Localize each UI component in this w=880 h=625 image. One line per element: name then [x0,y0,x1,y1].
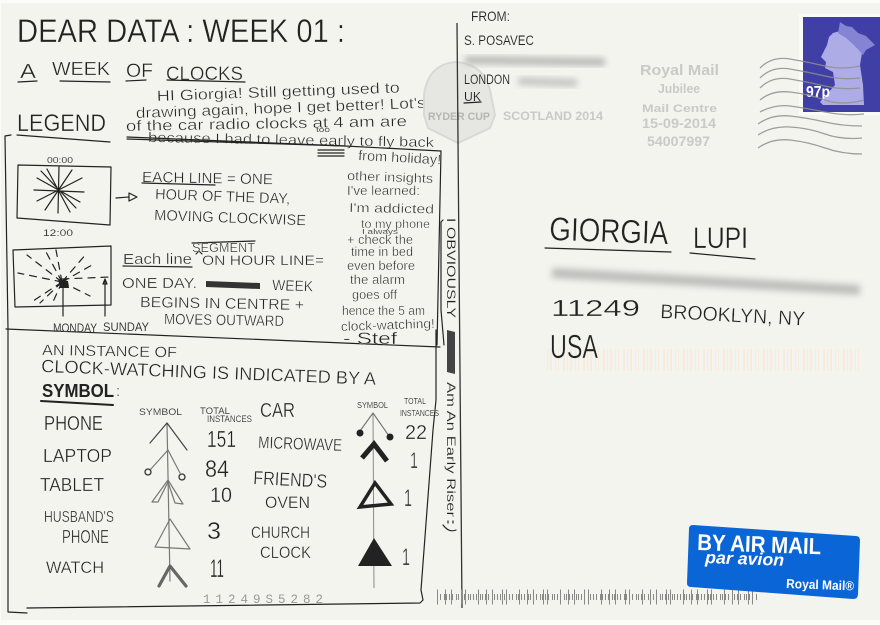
text block: greeting note [126,80,442,167]
stamp [799,14,880,115]
postmark: royal mail jubilee: 54007997 [647,133,710,149]
recipient city: USA [550,328,598,365]
panel frame: legend and symbols box [5,135,441,613]
text block: greeting note: HI Giorgia! Still getting used to [157,80,400,105]
heading: legend: LEGEND [17,110,106,137]
instance counts: left: 84 [205,456,229,483]
text block: instance of clock-watching: CLOCK-WATCHING IS INDICATED BY A [41,356,376,389]
vertical note: I obviously am an early riser: Am An Early Riser [444,382,458,517]
text block: other insights: time in bed [351,244,413,259]
return address: UK [464,89,481,104]
text block: instance of clock-watching [41,342,376,389]
text block: other insights: even before [347,258,415,273]
text block: greeting note: from holiday! [358,147,442,167]
instance counts: left [205,426,236,583]
column headers: right: TOTAL [404,397,426,406]
recipient city [550,295,806,365]
text block: other insights: I always [362,227,398,236]
clock diagram: each line is one hour [17,155,111,239]
recipient city: 11249 [551,295,640,321]
clock diagram: dashed week of segments [13,246,111,316]
device labels: right column: MICROWAVE [258,433,342,455]
air mail label [687,525,860,599]
column headers: left: INSTANCES [207,414,252,424]
instance counts: left: 10 [210,484,232,507]
return address [464,8,605,104]
recipient name: LUPI [693,222,748,255]
title: DEAR DATA : WEEK 01 : [17,13,345,49]
instance counts: right: 1 [410,448,418,473]
recipient city: BROOKLYN, NY [660,301,806,331]
phosphor barcode: orange tint [547,349,862,371]
text block: line segment explanation: ON HOUR LINE= [202,252,324,268]
text block: greeting note: of the car radio clocks at 4 am are [126,113,407,135]
subtitle: a week of clocks: CLOCKS [166,64,243,85]
stamp value: 97p [806,84,830,101]
device labels: right column [251,400,342,562]
postmark: royal mail jubilee [640,62,719,149]
text block: other insights: other insights [347,168,434,186]
text block: other insights: - Stef [343,329,397,348]
subtitle: a week of clocks: OF [126,61,153,82]
device labels: left column: LAPTOP [43,446,112,466]
device labels: right column: OVEN [265,493,310,512]
symbols: phone, laptop, tablet, husband's phone, watch [145,423,190,586]
labels: monday and sunday: SUNDAY [103,320,149,334]
postmark: wavy cancellation lines [758,58,864,154]
heading: symbol: SYMBOL [42,381,114,401]
column headers: right: SYMBOL [357,401,389,410]
divider: postcard centre line [457,23,462,608]
postmark: ryder cup [424,62,495,143]
recipient name: GIORGIA [549,210,669,251]
subtitle: a week of clocks: WEEK [52,59,110,79]
text block: other insights: to my phone [361,217,430,231]
column headers: right [357,397,439,418]
text block: line segment explanation [122,240,324,330]
column headers: left: TOTAL [200,406,230,416]
icon: queen's head [820,31,864,105]
text block: line segment explanation: Each line [123,251,192,268]
text block: each line explanation: EACH LINE = ONE [142,169,273,188]
text block: each line explanation: HOUR OF THE DAY, [155,186,290,208]
column headers: right: INSTANCES [400,409,439,418]
text block: line segment explanation: BEGINS IN CENTRE + [140,294,304,314]
postmark: royal mail jubilee: Royal Mail [640,62,719,79]
return address: FROM: [471,8,510,24]
column headers: left: SYMBOL [139,407,182,417]
device labels: left column: HUSBAND'S [44,509,114,526]
device labels: left column [40,413,114,577]
subtitle: a week of clocks [18,59,245,85]
text block: other insights: clock-watching! [341,316,435,334]
clock diagram: each line is one hour: 12:00 [43,228,73,239]
clock diagram: each line is one hour: 00:00 [47,155,73,165]
labels: monday and sunday [53,320,149,335]
text block: each line explanation: MOVING CLOCKWISE [154,207,306,229]
instance counts: right: 1 [404,485,412,512]
column headers: left [139,406,252,424]
device labels: right column: CAR [260,400,295,422]
instance counts: right: 22 [405,422,427,444]
text block: other insights: the alarm [350,272,405,287]
vertical note: I obviously am an early riser [441,218,458,531]
icon: crown [838,22,875,55]
labels: monday and sunday: MONDAY [53,321,97,335]
subtitle: a week of clocks: A [20,61,37,83]
air mail label: Royal Mail® [786,576,855,593]
device labels: right column: CLOCK [260,543,312,562]
text block: line segment explanation: SEGMENT [192,240,255,255]
postmark: royal mail jubilee: Mail Centre [642,103,717,115]
text block: line segment explanation: ONE DAY. [122,275,197,292]
device labels: left column: PHONE [44,413,103,435]
text block: instance of clock-watching: AN INSTANCE OF [42,342,177,361]
text block: greeting note: because I had to leave early to fly back [148,129,435,150]
postmark: ryder cup: RYDER CUP [428,111,490,123]
device labels: left column: TABLET [40,475,104,495]
instance counts: left: 11 [210,555,224,583]
text block: line segment explanation: WEEK [272,277,313,295]
text block: greeting note: drawing again, hope I get better! Lot's [136,95,426,122]
recipient name [545,210,755,259]
instance counts: right [402,422,427,571]
text block: other insights: hence the 5 am [342,303,425,318]
arrow: clock to explanation [116,193,137,201]
device labels: left column: PHONE [62,527,109,547]
heading: symbol: : [116,383,120,400]
printed barcode: bottom edge [437,594,758,600]
instance counts: left: 3 [207,518,221,545]
postmark: royal mail jubilee: Jubilee [658,81,700,96]
device labels: left column: WATCH [46,558,104,577]
air mail label: BY AIR MAIL [697,529,822,559]
postmark: royal mail jubilee: 15-09-2014 [642,115,716,131]
air mail label: par avion [704,548,784,570]
text block: greeting note: too [316,127,330,134]
text block: other insights: + check the [347,232,413,247]
symbols: car, microwave, friend's oven, church clock [356,413,394,588]
text block: other insights: goes off [352,287,397,302]
return address: S. POSAVEC [464,33,534,48]
text block: other insights: I've learned: [347,183,420,198]
instance counts: right: 1 [402,544,410,571]
blurred street address [552,273,860,290]
text block: line segment explanation: MOVES OUTWARD [164,311,284,330]
device labels: right column: FRIEND'S [253,468,328,493]
text block: each line explanation [142,169,306,229]
device labels: right column: CHURCH [251,523,310,542]
return address: LONDON [464,72,510,87]
printed number: sorting code: 11249S5282 [203,593,323,607]
instance counts: left: 151 [207,426,236,452]
vertical note: I obviously am an early riser: I OBVIOUSLY [444,218,458,318]
text block: other insights: I'm addicted [349,200,434,216]
postmark: scotland 2014: SCOTLAND 2014 [503,109,603,123]
text block: other insights [341,168,435,348]
